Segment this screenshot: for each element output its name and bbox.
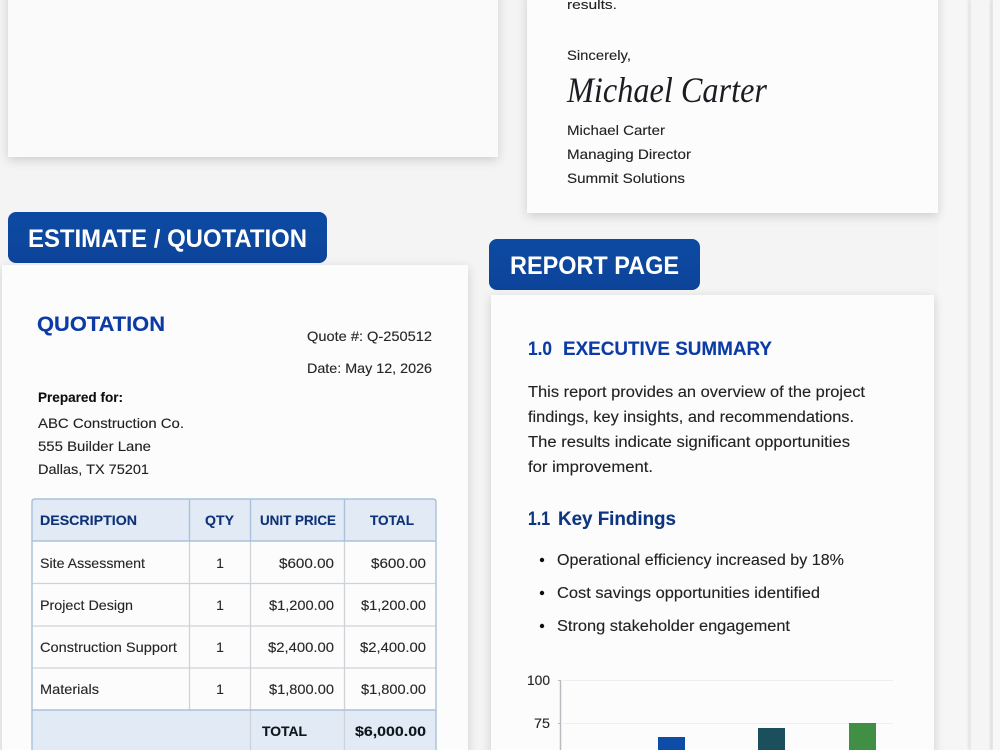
summary paragraph: findings, key insights, and recommendations.: [528, 409, 854, 426]
closing: Sincerely,: [567, 48, 631, 63]
bar: teal: [758, 728, 785, 750]
badge: estimate / quotation: [8, 212, 327, 263]
bar: green: [849, 723, 876, 750]
key findings list: Cost savings opportunities identified: [557, 585, 820, 602]
row: site assessment: Site Assessment: [40, 555, 145, 571]
heading: key findings: Key Findings: [558, 509, 676, 530]
row: site assessment: $600.00: [371, 555, 426, 571]
axis label 100: 100: [527, 672, 550, 688]
row: construction support: [40, 639, 426, 655]
row: materials: Materials: [40, 681, 99, 697]
table header: DESCRIPTION: [40, 512, 137, 528]
row: materials: [40, 681, 426, 697]
summary paragraph: [528, 384, 866, 476]
panel: letter page: [527, 0, 938, 213]
row: materials: $1,800.00: [269, 681, 334, 697]
heading: executive summary: 1.0: [528, 339, 552, 360]
axis label 75: 75: [534, 715, 550, 731]
badge: report page: [489, 239, 700, 290]
row: construction support: Construction Support: [40, 639, 177, 655]
summary paragraph: for improvement.: [528, 459, 653, 476]
client city: Dallas, TX 75201: [38, 461, 149, 477]
row: project design: [40, 597, 426, 613]
signature: Michael Carter: [566, 70, 768, 110]
bar chart: [527, 672, 893, 750]
bar: blue: [658, 737, 685, 750]
quote date: Date: May 12, 2026: [307, 360, 432, 376]
panel: blank document page: [8, 0, 498, 157]
row: total: TOTAL: [262, 723, 307, 739]
panel: quotation page: [2, 265, 468, 750]
summary paragraph: The results indicate significant opportunities: [528, 434, 850, 451]
row: materials: 1: [216, 681, 224, 697]
client name: ABC Construction Co.: [38, 415, 184, 431]
badge: estimate / quotation: ESTIMATE / QUOTATION: [28, 225, 307, 253]
quotation table: [32, 499, 436, 750]
signer title: Managing Director: [567, 146, 691, 162]
row: project design: 1: [216, 597, 224, 613]
row: total: $6,000.00: [355, 723, 426, 739]
row: site assessment: [40, 555, 426, 571]
row: project design: $1,200.00: [361, 597, 426, 613]
summary paragraph: This report provides an overview of the project: [528, 384, 866, 401]
key findings list: [540, 552, 844, 635]
client street: 555 Builder Lane: [38, 438, 151, 454]
row: project design: Project Design: [40, 597, 133, 613]
row: total: [262, 723, 426, 739]
row: project design: $1,200.00: [269, 597, 334, 613]
key findings list: Operational efficiency increased by 18%: [557, 552, 844, 569]
table header: [40, 512, 414, 528]
key findings list: Strong stakeholder engagement: [557, 618, 791, 635]
signer company: Summit Solutions: [567, 170, 685, 186]
signer name: Michael Carter: [567, 122, 665, 138]
row: site assessment: 1: [216, 555, 224, 571]
row: materials: $1,800.00: [361, 681, 426, 697]
row: construction support: $2,400.00: [268, 639, 334, 655]
table header: QTY: [205, 512, 235, 528]
heading: executive summary: EXECUTIVE SUMMARY: [563, 339, 772, 360]
row: construction support: $2,400.00: [360, 639, 426, 655]
quote number: Quote #: Q-250512: [307, 328, 432, 344]
heading: quotation: QUOTATION: [37, 313, 165, 336]
table header: UNIT PRICE: [260, 512, 336, 528]
prepared for label: Prepared for:: [38, 389, 123, 405]
heading: key findings: 1.1: [528, 509, 550, 530]
row: construction support: 1: [216, 639, 224, 655]
row: site assessment: $600.00: [279, 555, 334, 571]
badge: report page: REPORT PAGE: [510, 252, 679, 280]
panel: report page: [491, 295, 934, 750]
table header: TOTAL: [370, 512, 414, 528]
